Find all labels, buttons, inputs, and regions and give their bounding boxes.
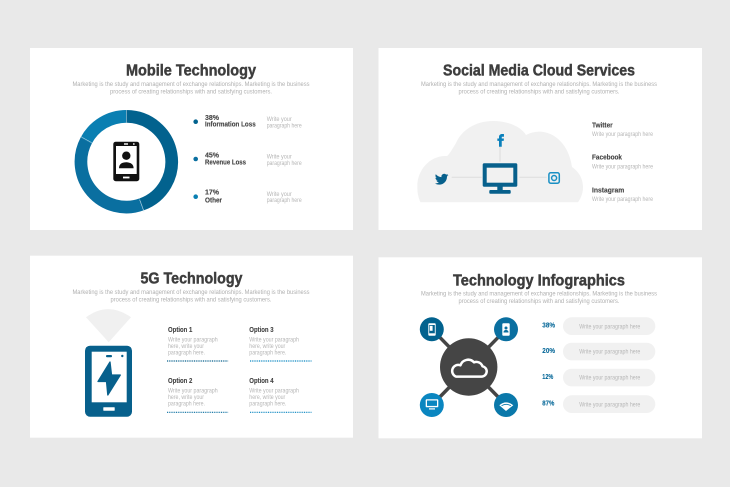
row: 87%: 87%: [542, 401, 555, 408]
text block: intro: Marketing is the study and management of exchange relationships. Marketing is the business: [421, 81, 658, 88]
option 3: [249, 327, 312, 361]
panel: social media cloud services: [378, 48, 702, 230]
legend: 17% other: Write your: [267, 192, 292, 198]
icon: monitor node: [420, 393, 444, 417]
option 4: Write your paragraph: [249, 388, 299, 394]
option 3: paragraph here.: [249, 350, 287, 356]
option 2: here, write your: [168, 395, 204, 401]
option 4: here, write your: [249, 395, 285, 401]
hub diagram: [420, 317, 518, 417]
item: facebook: Write your paragraph here: [592, 164, 654, 170]
legend: 38% information loss: Write your: [267, 117, 292, 123]
text block: intro: [421, 81, 658, 96]
legend: 38% information loss: 38%: [205, 115, 220, 122]
text block: intro: Marketing is the study and management of exchange relationships. Marketing is the business: [72, 81, 310, 88]
option 2: Write your paragraph: [168, 388, 218, 394]
text block: intro: [72, 81, 310, 96]
row: 12%: [542, 369, 655, 386]
row: 87%: [542, 395, 655, 413]
row: 87%: Write your paragraph here: [579, 402, 641, 408]
legend: 45% revenue loss: Revenue Loss: [205, 160, 246, 167]
donut chart: [81, 110, 172, 212]
option 2: Option 2: [168, 378, 192, 385]
heading: mobile technology: Mobile Technology: [126, 62, 256, 80]
row: 20%: 20%: [542, 348, 556, 355]
item: twitter: [592, 123, 654, 138]
row: 20%: Write your paragraph here: [579, 350, 641, 356]
row: 20%: [542, 343, 655, 360]
icon: phone node: [420, 317, 444, 341]
icon: monitor: [483, 163, 517, 194]
row: 38%: Write your paragraph here: [579, 324, 641, 330]
text block: intro: [72, 289, 310, 304]
option 1: Option 1: [168, 327, 192, 334]
legend: 17% other: paragraph here: [267, 198, 302, 204]
icon: instagram: [549, 173, 559, 183]
option 2: [167, 378, 228, 412]
heading: technology infographics: Technology Infographics: [453, 272, 625, 290]
item: twitter: Write your paragraph here: [592, 132, 654, 138]
text block: intro: [421, 290, 658, 305]
option 1: [167, 327, 228, 361]
option 1: paragraph here.: [168, 350, 205, 356]
heading: 5g technology: 5G Technology: [140, 270, 243, 288]
item: instagram: [592, 188, 654, 203]
icon: wifi node: [494, 393, 518, 417]
heading: social media cloud services: Social Media Cloud Services: [443, 62, 635, 80]
option 1: here, write your: [168, 344, 204, 350]
legend: 17% other: 17%: [205, 189, 220, 196]
icon: phone with lightning bolt: [85, 346, 132, 417]
legend: 17% other: Other: [205, 198, 222, 205]
option 2: paragraph here.: [168, 402, 205, 408]
legend: 45% revenue loss: 45%: [205, 152, 220, 159]
legend: 38% information loss: [193, 115, 302, 130]
panel: 5g technology: [30, 256, 353, 438]
icon: mobile phone with user: [113, 142, 139, 181]
icon: twitter: [435, 174, 448, 185]
text block: intro: process of creating relationships with and satisfying customers.: [458, 89, 620, 96]
option 4: Option 4: [249, 378, 274, 385]
item: instagram: Instagram: [592, 188, 624, 195]
item: facebook: [592, 155, 654, 170]
option 3: Option 3: [249, 327, 274, 334]
legend: 45% revenue loss: Write your: [267, 155, 292, 161]
icon: facebook: [497, 134, 504, 147]
text block: intro: process of creating relationships with and satisfying customers.: [458, 298, 620, 305]
text block: intro: Marketing is the study and management of exchange relationships. Marketing is the business: [72, 289, 310, 296]
text block: intro: Marketing is the study and management of exchange relationships. Marketing is the business: [421, 290, 658, 297]
option 4: [249, 378, 312, 412]
item: facebook: Facebook: [592, 155, 622, 162]
connector lines: [452, 147, 547, 177]
cloud shape: [417, 121, 583, 202]
row: 38%: [542, 317, 655, 335]
panel: mobile technology: [30, 48, 353, 230]
row: 12%: Write your paragraph here: [579, 376, 641, 382]
legend: 38% information loss: paragraph here: [267, 124, 302, 130]
icon: user phone node: [494, 317, 518, 341]
row: 38%: 38%: [542, 323, 556, 330]
item: instagram: Write your paragraph here: [592, 197, 654, 203]
text block: intro: process of creating relationships with and satisfying customers.: [110, 89, 272, 96]
option 4: paragraph here.: [249, 402, 287, 408]
icon: central cloud: [440, 338, 497, 396]
option 3: Write your paragraph: [249, 338, 299, 344]
legend: 45% revenue loss: paragraph here: [267, 161, 302, 167]
text block: intro: process of creating relationships with and satisfying customers.: [110, 297, 272, 304]
legend: 17% other: [193, 189, 302, 205]
panel: technology infographics: [378, 257, 702, 438]
option 3: here, write your: [249, 344, 285, 350]
icon: signal wedge: [86, 309, 131, 342]
option 1: Write your paragraph: [168, 338, 218, 344]
item: twitter: Twitter: [592, 123, 613, 130]
row: 12%: 12%: [542, 374, 554, 381]
legend: 38% information loss: Information Loss: [205, 121, 256, 128]
legend: 45% revenue loss: [193, 152, 302, 167]
